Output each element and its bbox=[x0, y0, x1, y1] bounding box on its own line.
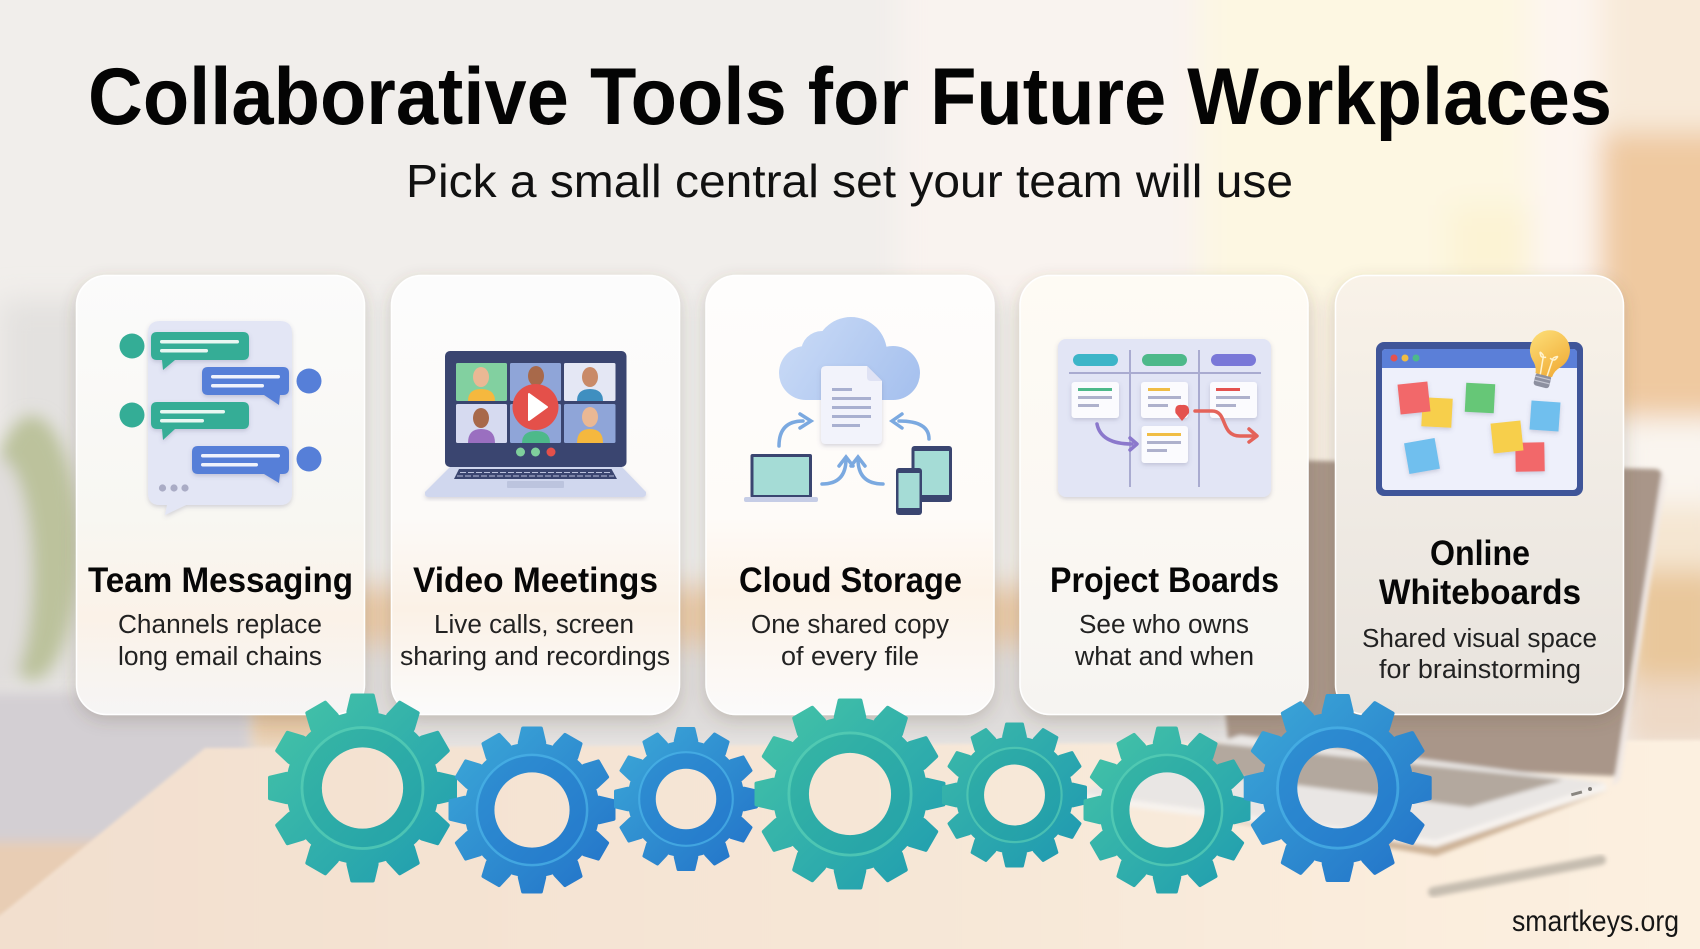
gear 2 blue bbox=[444, 722, 620, 898]
panel: online whiteboards bbox=[1336, 276, 1624, 714]
icon: kanban board bbox=[1058, 339, 1271, 497]
gear 7 blue bbox=[1239, 689, 1436, 887]
gear 5 teal bbox=[938, 719, 1091, 871]
card heading bbox=[1379, 534, 1581, 612]
gear 3 blue bbox=[610, 723, 762, 875]
icon: whiteboard with sticky notes bbox=[1376, 326, 1583, 496]
panel: video meetings bbox=[392, 276, 680, 714]
card description: Shared visual space bbox=[1362, 625, 1597, 653]
card description bbox=[1074, 611, 1254, 671]
card description: Channels replace bbox=[118, 611, 322, 639]
gear 1 teal bbox=[263, 689, 462, 887]
pen bbox=[1433, 860, 1601, 892]
card heading: Whiteboards bbox=[1379, 573, 1581, 612]
card background bbox=[1020, 276, 1308, 714]
card description: long email chains bbox=[118, 643, 322, 671]
card description: of every file bbox=[781, 643, 919, 671]
card description bbox=[118, 611, 322, 671]
card background bbox=[76, 276, 364, 714]
card description: what and when bbox=[1074, 643, 1254, 671]
card heading: Online bbox=[1430, 534, 1530, 573]
gear 4 teal bbox=[750, 694, 950, 894]
card background bbox=[706, 276, 994, 714]
source credit: smartkeys.org bbox=[1512, 905, 1679, 938]
card description bbox=[400, 611, 670, 671]
icon: chat bubbles bbox=[120, 321, 322, 515]
card description: sharing and recordings bbox=[400, 643, 670, 671]
panel: team messaging bbox=[76, 276, 364, 714]
card background bbox=[1336, 276, 1624, 714]
card description: for brainstorming bbox=[1379, 656, 1581, 684]
icon: laptop video call bbox=[425, 351, 646, 497]
desk surface bbox=[0, 740, 1700, 949]
card description: Live calls, screen bbox=[434, 611, 634, 639]
card description: One shared copy bbox=[751, 611, 949, 639]
card description: See who owns bbox=[1079, 611, 1249, 639]
card description bbox=[1362, 625, 1597, 684]
subtitle: Pick a small central set your team will use bbox=[406, 155, 1293, 207]
icon: light bulb bbox=[1521, 326, 1574, 392]
row of gears bbox=[263, 689, 1436, 898]
panel: cloud storage bbox=[706, 276, 994, 714]
card heading: Team Messaging bbox=[88, 561, 353, 600]
gear 6 teal bbox=[1079, 722, 1255, 898]
card heading: Cloud Storage bbox=[739, 561, 962, 600]
card background bbox=[392, 276, 680, 714]
panel: project boards bbox=[1020, 276, 1308, 714]
card heading: Project Boards bbox=[1050, 561, 1279, 600]
laptop bbox=[1077, 458, 1666, 856]
title: Collaborative Tools for Future Workplaces bbox=[88, 52, 1612, 142]
card description bbox=[751, 611, 949, 671]
icon: cloud sync bbox=[744, 317, 952, 515]
card heading: Video Meetings bbox=[413, 561, 658, 600]
